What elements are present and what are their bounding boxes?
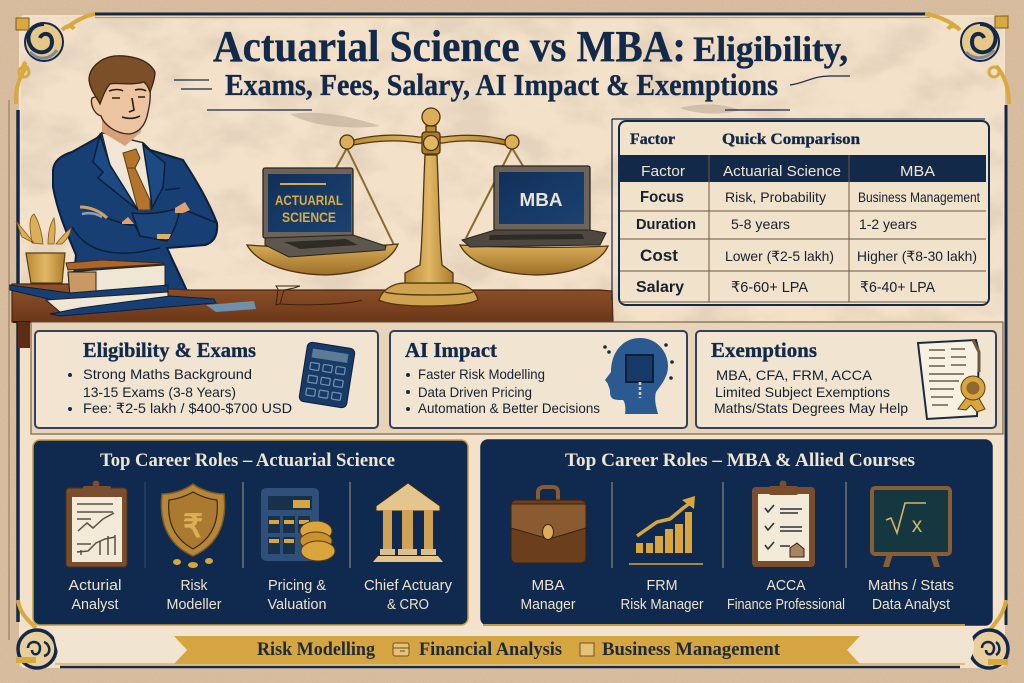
role: maths stats data analyst: Maths / Stats: [868, 578, 954, 594]
table header row: Actuarial Science: [723, 163, 841, 180]
role: MBA manager: MBA: [532, 578, 565, 594]
panel: exemptions: Exemptions: [711, 338, 817, 362]
role: actuarial analyst: Analyst: [72, 597, 118, 613]
right laptop: MBA: [520, 190, 562, 210]
role: ACCA finance professional: ACCA: [766, 578, 806, 594]
row: focus: [640, 189, 980, 206]
man's face: [91, 76, 150, 134]
role: MBA manager: [511, 487, 586, 613]
title: Exams, Fees, Salary, AI Impact & Exemptions: [225, 67, 778, 102]
row: duration: 1-2 years: [859, 216, 917, 232]
role: risk modeller: Modeller: [166, 597, 222, 613]
table caption: [630, 131, 860, 148]
panel: eligibility & exams: Eligibility & Exams: [83, 338, 256, 362]
role: risk modeller: Risk: [180, 578, 208, 594]
row: focus: Business Management: [858, 189, 980, 205]
role: ACCA finance professional: Finance Professional: [727, 597, 845, 613]
panel: AI impact: Automation & Better Decisions: [418, 400, 600, 416]
panel: AI impact: Faster Risk Modelling: [418, 366, 545, 382]
panel: exemptions: Maths/Stats Degrees May Help: [714, 400, 908, 416]
role: risk modeller: ₹: [183, 508, 203, 544]
man's hair: [89, 56, 155, 104]
left pan: [247, 244, 398, 275]
left laptop: SCIENCE: [282, 209, 336, 225]
bottom banner: [52, 629, 974, 664]
right laptop: [462, 166, 606, 247]
row: duration: [636, 216, 917, 233]
table header row: Factor: [641, 163, 685, 180]
role: MBA manager: Manager: [520, 597, 576, 613]
icon: AI head: [603, 338, 674, 414]
panel: AI impact: [390, 331, 687, 428]
man's neck: [102, 118, 143, 146]
man's suit: [53, 133, 217, 297]
role: maths stats data analyst: x: [912, 514, 923, 537]
panel: AI impact: AI Impact: [405, 338, 497, 362]
corner ornament: bottom right: [955, 600, 1008, 668]
panel: career roles MBA: Top Career Roles – MBA & Allied Courses: [565, 450, 915, 471]
row: cost: Higher (₹8-30 lakh): [857, 248, 977, 264]
icon: certificate: [918, 340, 985, 419]
panel: eligibility & exams: 13-15 Exams (3-8 Years): [83, 384, 236, 400]
scale chains: [336, 148, 523, 245]
stacked books: [10, 260, 362, 316]
panel: career roles MBA: [481, 440, 992, 625]
bottom banner: Financial Analysis: [419, 639, 562, 660]
comparison table panel: [612, 119, 989, 305]
title: [174, 22, 850, 110]
role: chief actuary: [364, 483, 453, 613]
role: actuarial analyst: [66, 480, 127, 613]
table caption: Factor: [630, 131, 675, 148]
table header row: MBA: [900, 163, 935, 180]
man's jacket details: [72, 135, 217, 253]
icon: folder: [393, 643, 409, 656]
panel: career roles actuarial science: [33, 440, 468, 625]
panel: eligibility & exams: [35, 331, 378, 428]
row: focus: Risk, Probability: [725, 189, 826, 205]
row: duration: Duration: [636, 216, 696, 233]
row: duration: 5-8 years: [731, 216, 790, 232]
corner ornament: bottom left: [16, 600, 69, 668]
scale stand: [340, 108, 519, 306]
corner ornament: top left: [16, 14, 95, 104]
role: chief actuary: Chief Actuary: [364, 578, 453, 594]
panel: AI impact: Data Driven Pricing: [418, 384, 532, 400]
panel: exemptions: [696, 331, 996, 428]
bottom banner: Business Management: [602, 639, 781, 660]
role: maths stats data analyst: Data Analyst: [872, 597, 950, 613]
pencil cup: [16, 214, 71, 283]
role: actuarial analyst: Acturial: [68, 578, 122, 594]
role: ACCA finance professional: [727, 480, 845, 613]
row: salary: Salary: [636, 279, 684, 296]
row: cost: [640, 246, 977, 265]
table caption: Quick Comparison: [722, 131, 860, 148]
panel: exemptions: Limited Subject Exemptions: [715, 384, 890, 400]
row: cost: Cost: [640, 246, 678, 265]
middle band: [31, 322, 1003, 434]
icon: calculator: [299, 342, 355, 408]
panel: career roles actuarial science: Top Career Roles – Actuarial Science: [100, 450, 395, 471]
right pan: [460, 245, 608, 275]
row: salary: ₹6-60+ LPA: [731, 279, 808, 296]
row: salary: ₹6-40+ LPA: [860, 279, 935, 296]
role: FRM risk manager: [620, 496, 704, 613]
role: chief actuary: & CRO: [387, 597, 429, 613]
role: FRM risk manager: FRM: [646, 578, 678, 594]
role: FRM risk manager: Risk Manager: [620, 597, 704, 613]
man's hands and cuff details: [80, 202, 190, 239]
role: risk modeller: [161, 484, 225, 613]
role: maths stats data analyst: [868, 488, 954, 613]
man's shirt and tie: [102, 133, 152, 210]
row: focus: Focus: [640, 189, 684, 206]
role: pricing & valuation: Valuation: [268, 597, 326, 613]
title: Eligibility,: [693, 29, 848, 69]
balance scale: [247, 108, 608, 306]
bottom banner: Risk Modelling: [257, 639, 375, 660]
row: salary: [636, 279, 935, 296]
role: pricing & valuation: [261, 488, 335, 613]
table header row: [620, 155, 986, 182]
panel: exemptions: MBA, CFA, FRM, ACCA: [716, 367, 873, 383]
corner ornament: top right: [925, 14, 1009, 104]
role: pricing & valuation: Pricing &: [268, 578, 326, 594]
row: cost: Lower (₹2-5 lakh): [725, 248, 834, 264]
icon: square: [580, 643, 594, 656]
illustration: businessman: [53, 56, 217, 297]
panel: eligibility & exams: Fee: ₹2-5 lakh / $400-$700 USD: [83, 400, 292, 416]
man's facial features: [109, 89, 146, 118]
left laptop: ACTUARIAL: [275, 192, 343, 208]
left laptop: [263, 168, 386, 257]
desk: [12, 284, 613, 348]
panel: eligibility & exams: Strong Maths Background: [83, 366, 252, 382]
title: Actuarial Science vs MBA:: [213, 22, 686, 71]
